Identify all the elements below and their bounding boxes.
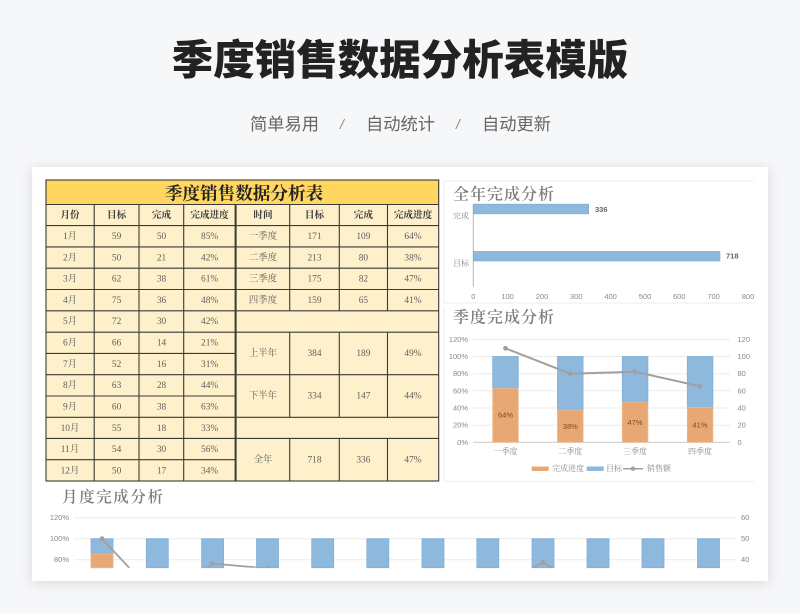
monthly table: 目标 (107, 209, 128, 221)
quarterly table: 四季度 (249, 294, 278, 306)
x axis labels: 100 (501, 292, 514, 301)
x axis labels: 800 (742, 292, 754, 301)
monthly table: 14 (157, 338, 166, 348)
left axis labels: 120% (449, 335, 468, 344)
monthly table: 30 (157, 317, 166, 327)
monthly table: 50 (112, 466, 122, 476)
right axis labels: 100 (738, 352, 750, 361)
quarterly table: 完成进度 (394, 209, 433, 221)
monthly table: 4月 (63, 295, 77, 306)
left axis labels: 20% (453, 421, 468, 430)
stacked bars: 38% (563, 422, 578, 431)
right axis labels: 20 (738, 421, 746, 430)
x axis labels: 700 (707, 292, 720, 301)
monthly table: 54 (112, 445, 122, 455)
right axis labels: 80 (738, 369, 746, 378)
quarterly table: 65 (359, 296, 368, 306)
quarterly table: 82 (359, 274, 368, 284)
x axis labels: 0 (471, 292, 475, 301)
quarterly table: 336 (356, 456, 371, 466)
category labels: 四季度 (688, 446, 712, 456)
monthly table: 38 (157, 274, 166, 284)
monthly table: 63% (201, 402, 218, 412)
monthly table: 50 (112, 253, 122, 263)
monthly table: 18 (157, 424, 166, 434)
quarterly table: 80 (359, 253, 368, 263)
chart heading: 全年完成分析 (453, 184, 555, 204)
quarterly table: 384 (307, 349, 322, 359)
right axis labels: 60 (741, 513, 749, 522)
right axis labels: 50 (741, 534, 749, 543)
monthly table: 61% (201, 274, 218, 284)
quarterly table: 41% (404, 296, 422, 306)
monthly table: 60 (112, 402, 122, 412)
quarterly table: 171 (307, 232, 322, 242)
monthly table: 月份 (60, 209, 80, 221)
monthly table: 42% (201, 253, 218, 263)
monthly table: 52 (112, 360, 122, 370)
bar: 目标 (453, 252, 739, 268)
monthly table: 5月 (63, 316, 77, 327)
panel: monthly completion chart (50, 487, 749, 575)
stacked bars: 47% (627, 418, 643, 427)
table title bar: 季度销售数据分析表 (165, 184, 324, 204)
panel: annual completion chart (444, 181, 754, 303)
title: 季度销售数据分析表模版 (172, 36, 628, 84)
panel: quarterly completion chart (444, 306, 754, 482)
x axis labels: 300 (570, 292, 583, 301)
monthly table: 75 (112, 296, 122, 306)
monthly table: 16 (157, 360, 166, 370)
monthly bars (91, 539, 720, 568)
monthly table: 完成 (152, 209, 171, 221)
monthly table: 66 (112, 338, 122, 348)
monthly table: 28 (157, 381, 166, 391)
quarterly table: 47% (404, 274, 422, 284)
quarterly table: 完成 (354, 209, 373, 221)
monthly table: 21 (157, 253, 166, 263)
x axis labels: 200 (536, 292, 548, 301)
monthly table: 48% (201, 296, 218, 306)
quarterly table: 一季度 (249, 230, 278, 242)
quarterly table: 三季度 (249, 272, 278, 284)
grid lines (74, 518, 736, 560)
right axis labels (741, 513, 749, 564)
monthly table: 50 (157, 232, 166, 242)
monthly table: 完成进度 (190, 209, 229, 221)
monthly table: 3月 (63, 274, 77, 284)
line: monthly sales (100, 536, 554, 568)
bar: 完成 (453, 204, 608, 220)
monthly table: 72 (112, 317, 122, 327)
category labels (494, 446, 712, 456)
panel: data table (46, 180, 439, 481)
subtitle: / (455, 116, 462, 132)
line: sales (503, 346, 702, 389)
monthly table: 6月 (63, 338, 77, 348)
left axis labels: 100% (449, 352, 468, 361)
chart heading: 季度完成分析 (453, 308, 555, 326)
table title bar (46, 180, 439, 204)
monthly table: 9月 (63, 402, 77, 412)
stacked bars: 41% (692, 420, 708, 430)
monthly table: 33% (201, 424, 218, 434)
quarterly table: 49% (404, 349, 422, 359)
legend (532, 463, 672, 473)
left axis labels (449, 335, 468, 447)
axis (472, 205, 474, 287)
bar: 完成: 完成 (453, 210, 469, 220)
monthly table (60, 209, 229, 476)
quarterly table: 下半年 (249, 390, 277, 402)
left axis labels: 80% (453, 369, 468, 378)
quarterly table: 718 (307, 456, 322, 466)
legend: 目标 (606, 463, 623, 473)
quarterly table: 全年 (254, 454, 272, 466)
bar: 目标: 718 (726, 252, 739, 260)
quarterly table: 目标 (305, 209, 325, 221)
quarterly table: 213 (307, 253, 322, 263)
left axis labels: 60% (453, 386, 468, 395)
x axis labels: 500 (639, 292, 651, 301)
monthly table: 10月 (61, 423, 79, 434)
quarterly table: 二季度 (249, 251, 278, 263)
monthly table: 17 (157, 466, 166, 476)
x axis labels: 400 (604, 292, 617, 301)
quarterly table: 159 (307, 296, 322, 306)
monthly table: 63 (112, 381, 122, 391)
monthly table: 56% (201, 445, 218, 455)
bar: 目标: 目标 (453, 258, 470, 268)
category labels: 一季度 (494, 446, 518, 456)
left axis labels: 100% (50, 534, 69, 543)
legend: 完成进度 (552, 463, 584, 473)
monthly table: 21% (201, 338, 218, 348)
monthly table: 55 (112, 424, 122, 434)
monthly table: 30 (157, 445, 166, 455)
left axis labels: 0% (457, 438, 468, 447)
monthly table: 42% (201, 317, 218, 327)
right axis labels (738, 335, 750, 447)
stacked bars (493, 356, 713, 442)
left axis labels: 120% (50, 513, 69, 522)
monthly table: 62 (112, 274, 122, 284)
monthly table: 1月 (63, 231, 77, 242)
x axis labels (471, 292, 754, 301)
monthly table: 7月 (63, 359, 77, 370)
monthly table: 34% (201, 466, 218, 476)
x axis labels: 600 (673, 292, 686, 301)
monthly table: 38 (157, 402, 166, 412)
quarterly table: 47% (404, 456, 422, 466)
quarterly table: 上半年 (249, 347, 277, 359)
category labels: 三季度 (623, 446, 647, 456)
monthly table: 11月 (61, 444, 79, 455)
right axis labels: 120 (738, 335, 750, 344)
monthly table: 85% (201, 232, 218, 242)
quarterly table (249, 209, 433, 466)
chart heading: 月度完成分析 (62, 487, 165, 506)
quarterly table: 64% (404, 232, 422, 242)
subtitle (250, 114, 551, 134)
subtitle: 自动统计 (366, 114, 435, 134)
quarterly table: 44% (404, 392, 422, 402)
stacked bars: 64% (498, 410, 513, 420)
quarterly table: 175 (307, 274, 322, 284)
monthly table: 2月 (63, 252, 77, 263)
quarterly table: 109 (356, 232, 371, 242)
monthly table: 36 (157, 296, 166, 306)
subtitle: / (339, 116, 346, 132)
left axis labels: 80% (54, 555, 69, 564)
right axis labels: 40 (738, 404, 746, 412)
monthly table: 31% (201, 360, 218, 370)
monthly table: 59 (112, 232, 122, 242)
right axis labels: 0 (738, 438, 742, 447)
left axis labels (50, 513, 69, 564)
subtitle: 自动更新 (482, 114, 551, 134)
subtitle: 简单易用 (250, 114, 319, 134)
legend: 销售额 (647, 463, 672, 473)
right axis labels: 40 (741, 555, 749, 564)
bar: 完成: 336 (595, 205, 608, 214)
panel: worksheet card (32, 167, 768, 581)
left axis labels: 40% (453, 404, 468, 412)
quarterly table: 时间 (253, 209, 273, 221)
right axis labels: 60 (738, 386, 746, 395)
monthly table: 12月 (61, 465, 79, 476)
quarterly table: 38% (404, 253, 422, 263)
quarterly table: 147 (356, 392, 371, 402)
quarterly table: 189 (356, 349, 371, 359)
monthly table: 44% (201, 381, 218, 391)
quarterly table: 334 (307, 392, 322, 402)
monthly table: 8月 (63, 380, 77, 391)
category labels: 二季度 (558, 446, 582, 456)
grid lines (473, 339, 730, 425)
